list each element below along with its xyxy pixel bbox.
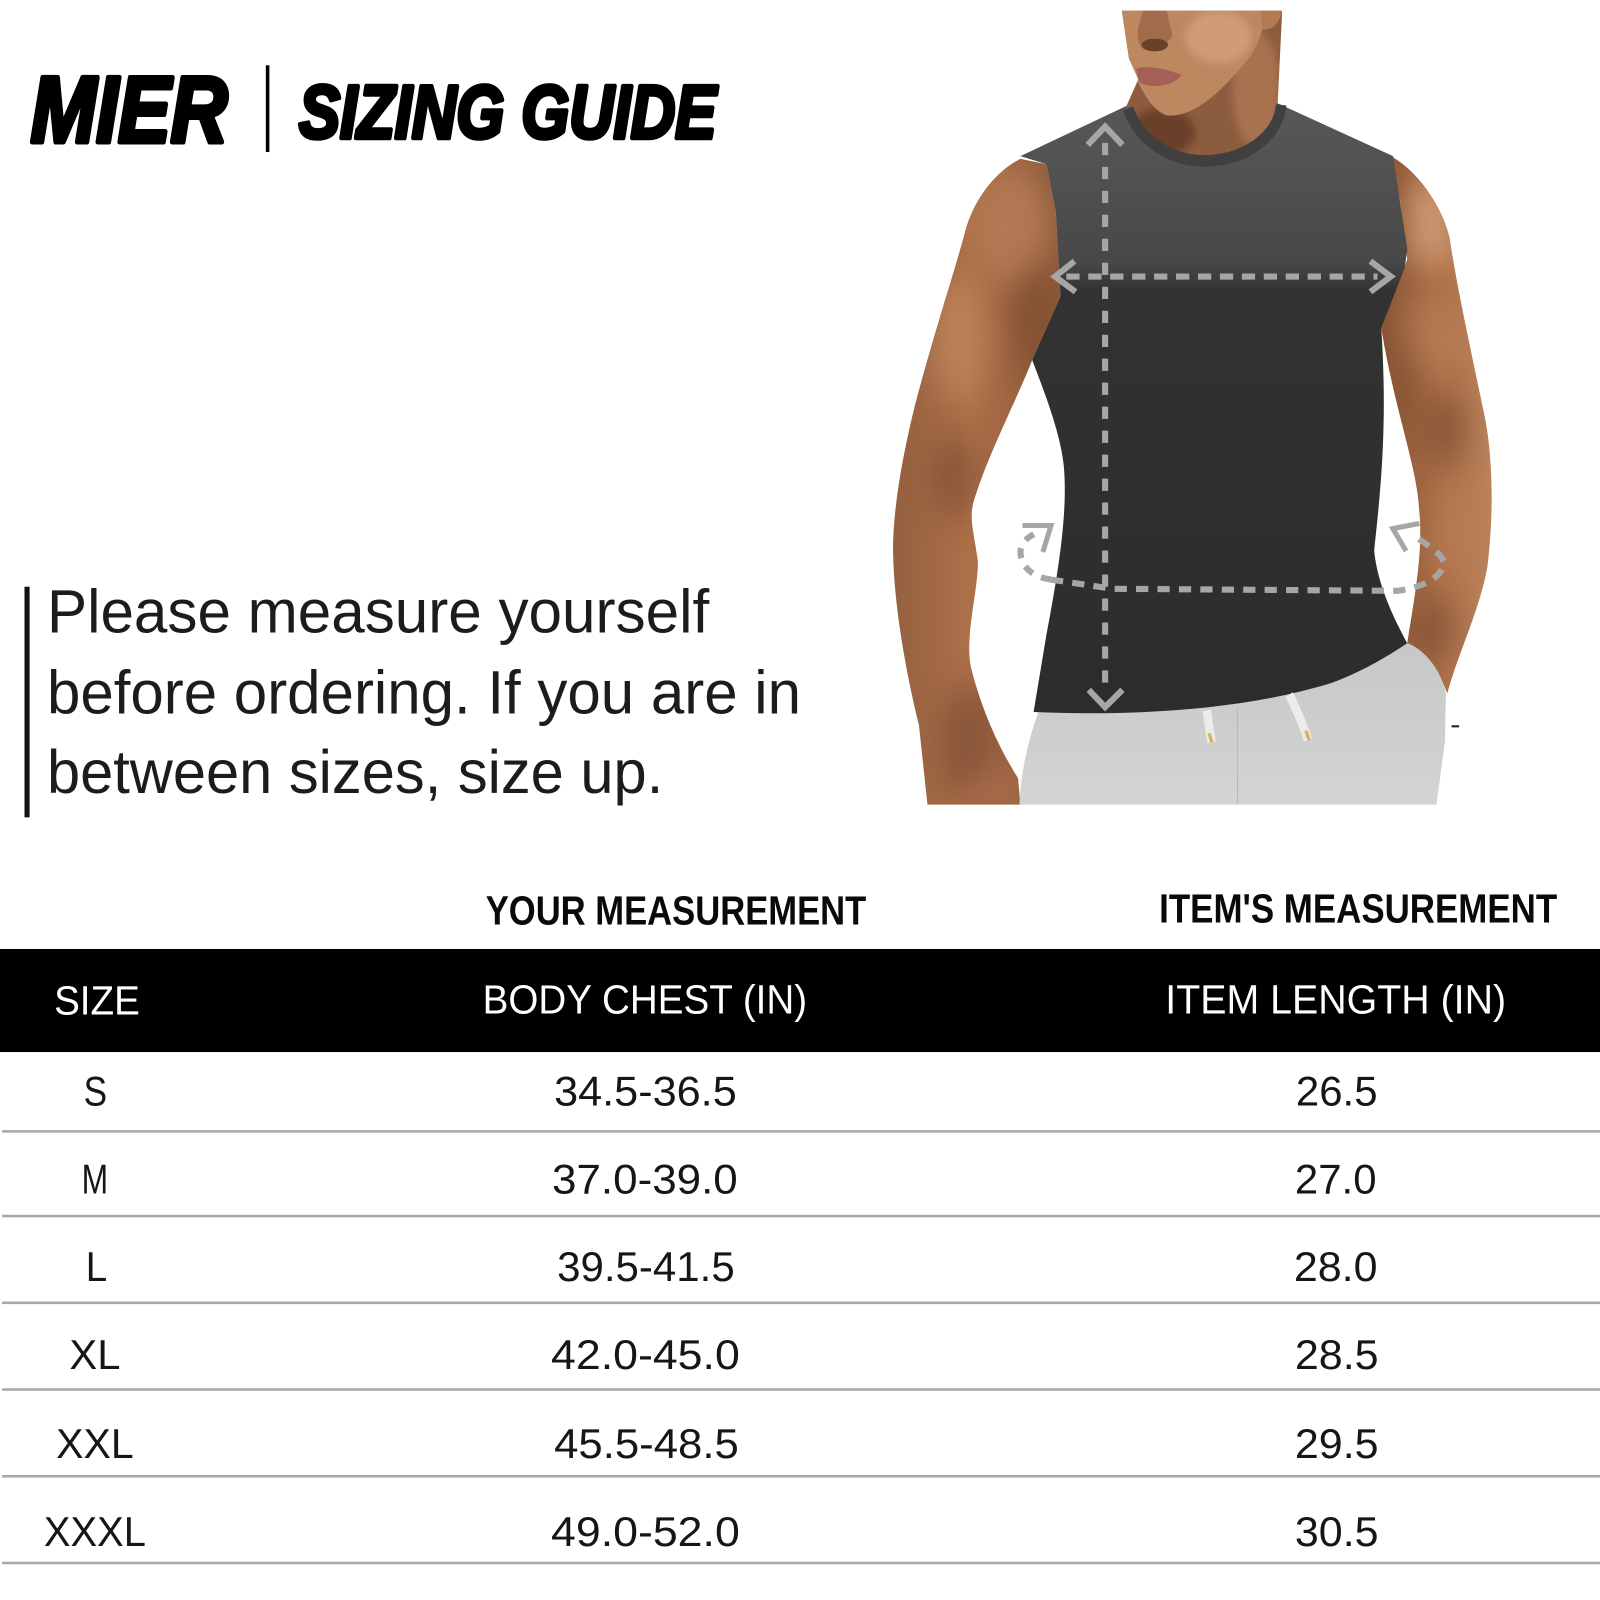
head and neck bbox=[1122, 10, 1282, 156]
callout: measuring advice: before ordering. If you are in bbox=[47, 658, 801, 726]
row M bbox=[2, 1155, 1600, 1217]
nostril bbox=[1142, 39, 1168, 51]
row L: 39.5-41.5 bbox=[557, 1243, 735, 1290]
row L bbox=[2, 1243, 1600, 1304]
row M: 37.0-39.0 bbox=[552, 1155, 738, 1202]
callout text: Please measure yourself bbox=[47, 578, 710, 646]
measurement guides bbox=[1020, 127, 1445, 707]
table header band: BODY CHEST (IN) bbox=[483, 976, 807, 1022]
row XL: 28.5 bbox=[1295, 1331, 1379, 1378]
row S: 26.5 bbox=[1296, 1068, 1378, 1115]
neck light side bbox=[1233, 32, 1280, 148]
brand name MIER: MIER bbox=[31, 57, 228, 162]
right arm bbox=[1381, 156, 1492, 693]
ear bbox=[1261, 11, 1282, 30]
row M: 27.0 bbox=[1295, 1155, 1377, 1202]
left arm bbox=[893, 159, 1060, 805]
callout: measuring advice: between sizes, size up. bbox=[47, 738, 663, 806]
model figure bbox=[893, 5, 1492, 807]
pants tick bbox=[1452, 725, 1459, 727]
illustration: model wearing sleeveless shirt with measurement guides bbox=[893, 5, 1492, 807]
shirt bbox=[1020, 103, 1407, 713]
lips bbox=[1136, 67, 1182, 86]
row L: L bbox=[86, 1243, 107, 1290]
heading SIZING GUIDE: SIZING GUIDE bbox=[299, 71, 718, 155]
callout: measuring advice bbox=[24, 578, 801, 817]
drawstring tips bbox=[1209, 731, 1309, 742]
cheek highlight bbox=[1185, 11, 1252, 64]
nose bbox=[1138, 11, 1172, 50]
title divider bbox=[266, 65, 269, 152]
face bbox=[1122, 11, 1265, 116]
row S: S bbox=[84, 1068, 107, 1115]
row XXXL bbox=[2, 1508, 1600, 1564]
row M: M bbox=[82, 1155, 108, 1202]
table header band: ITEM LENGTH (IN) bbox=[1165, 976, 1506, 1022]
shorts bbox=[1019, 643, 1446, 805]
row S bbox=[2, 1068, 1600, 1133]
chest line with arrowheads bbox=[1055, 261, 1391, 292]
row XXXL: 30.5 bbox=[1295, 1508, 1379, 1555]
drawstring right bbox=[1289, 695, 1308, 740]
neck shadow bbox=[1136, 106, 1197, 152]
row S: 34.5-36.5 bbox=[554, 1068, 737, 1115]
left arm shading bbox=[931, 169, 1056, 807]
row XXL: XXL bbox=[56, 1420, 134, 1467]
shorts centre seam bbox=[1236, 707, 1238, 805]
right arm shading bbox=[1388, 175, 1480, 662]
table header band: SIZE bbox=[54, 977, 140, 1023]
row L: 28.0 bbox=[1294, 1243, 1378, 1290]
row XXL bbox=[2, 1420, 1600, 1478]
row XL bbox=[2, 1331, 1600, 1391]
drawstring left bbox=[1207, 710, 1211, 742]
callout accent bar bbox=[24, 587, 30, 817]
waist line with curved ends bbox=[1020, 523, 1445, 591]
row XXXL: 49.0-52.0 bbox=[551, 1508, 740, 1555]
row XL: XL bbox=[69, 1331, 120, 1378]
shirt collar bbox=[1128, 105, 1281, 161]
row XL: 42.0-45.0 bbox=[551, 1331, 740, 1378]
column group heading: your measurement: YOUR MEASUREMENT bbox=[486, 887, 866, 933]
size table bbox=[0, 949, 1600, 1564]
title: brand and sizing guide bbox=[31, 57, 718, 162]
row XXXL: XXXL bbox=[44, 1508, 146, 1555]
row XXL: 29.5 bbox=[1295, 1420, 1379, 1467]
row XXL: 45.5-48.5 bbox=[554, 1420, 739, 1467]
table header band bbox=[0, 949, 1600, 1052]
length line with arrowheads bbox=[1088, 127, 1122, 707]
